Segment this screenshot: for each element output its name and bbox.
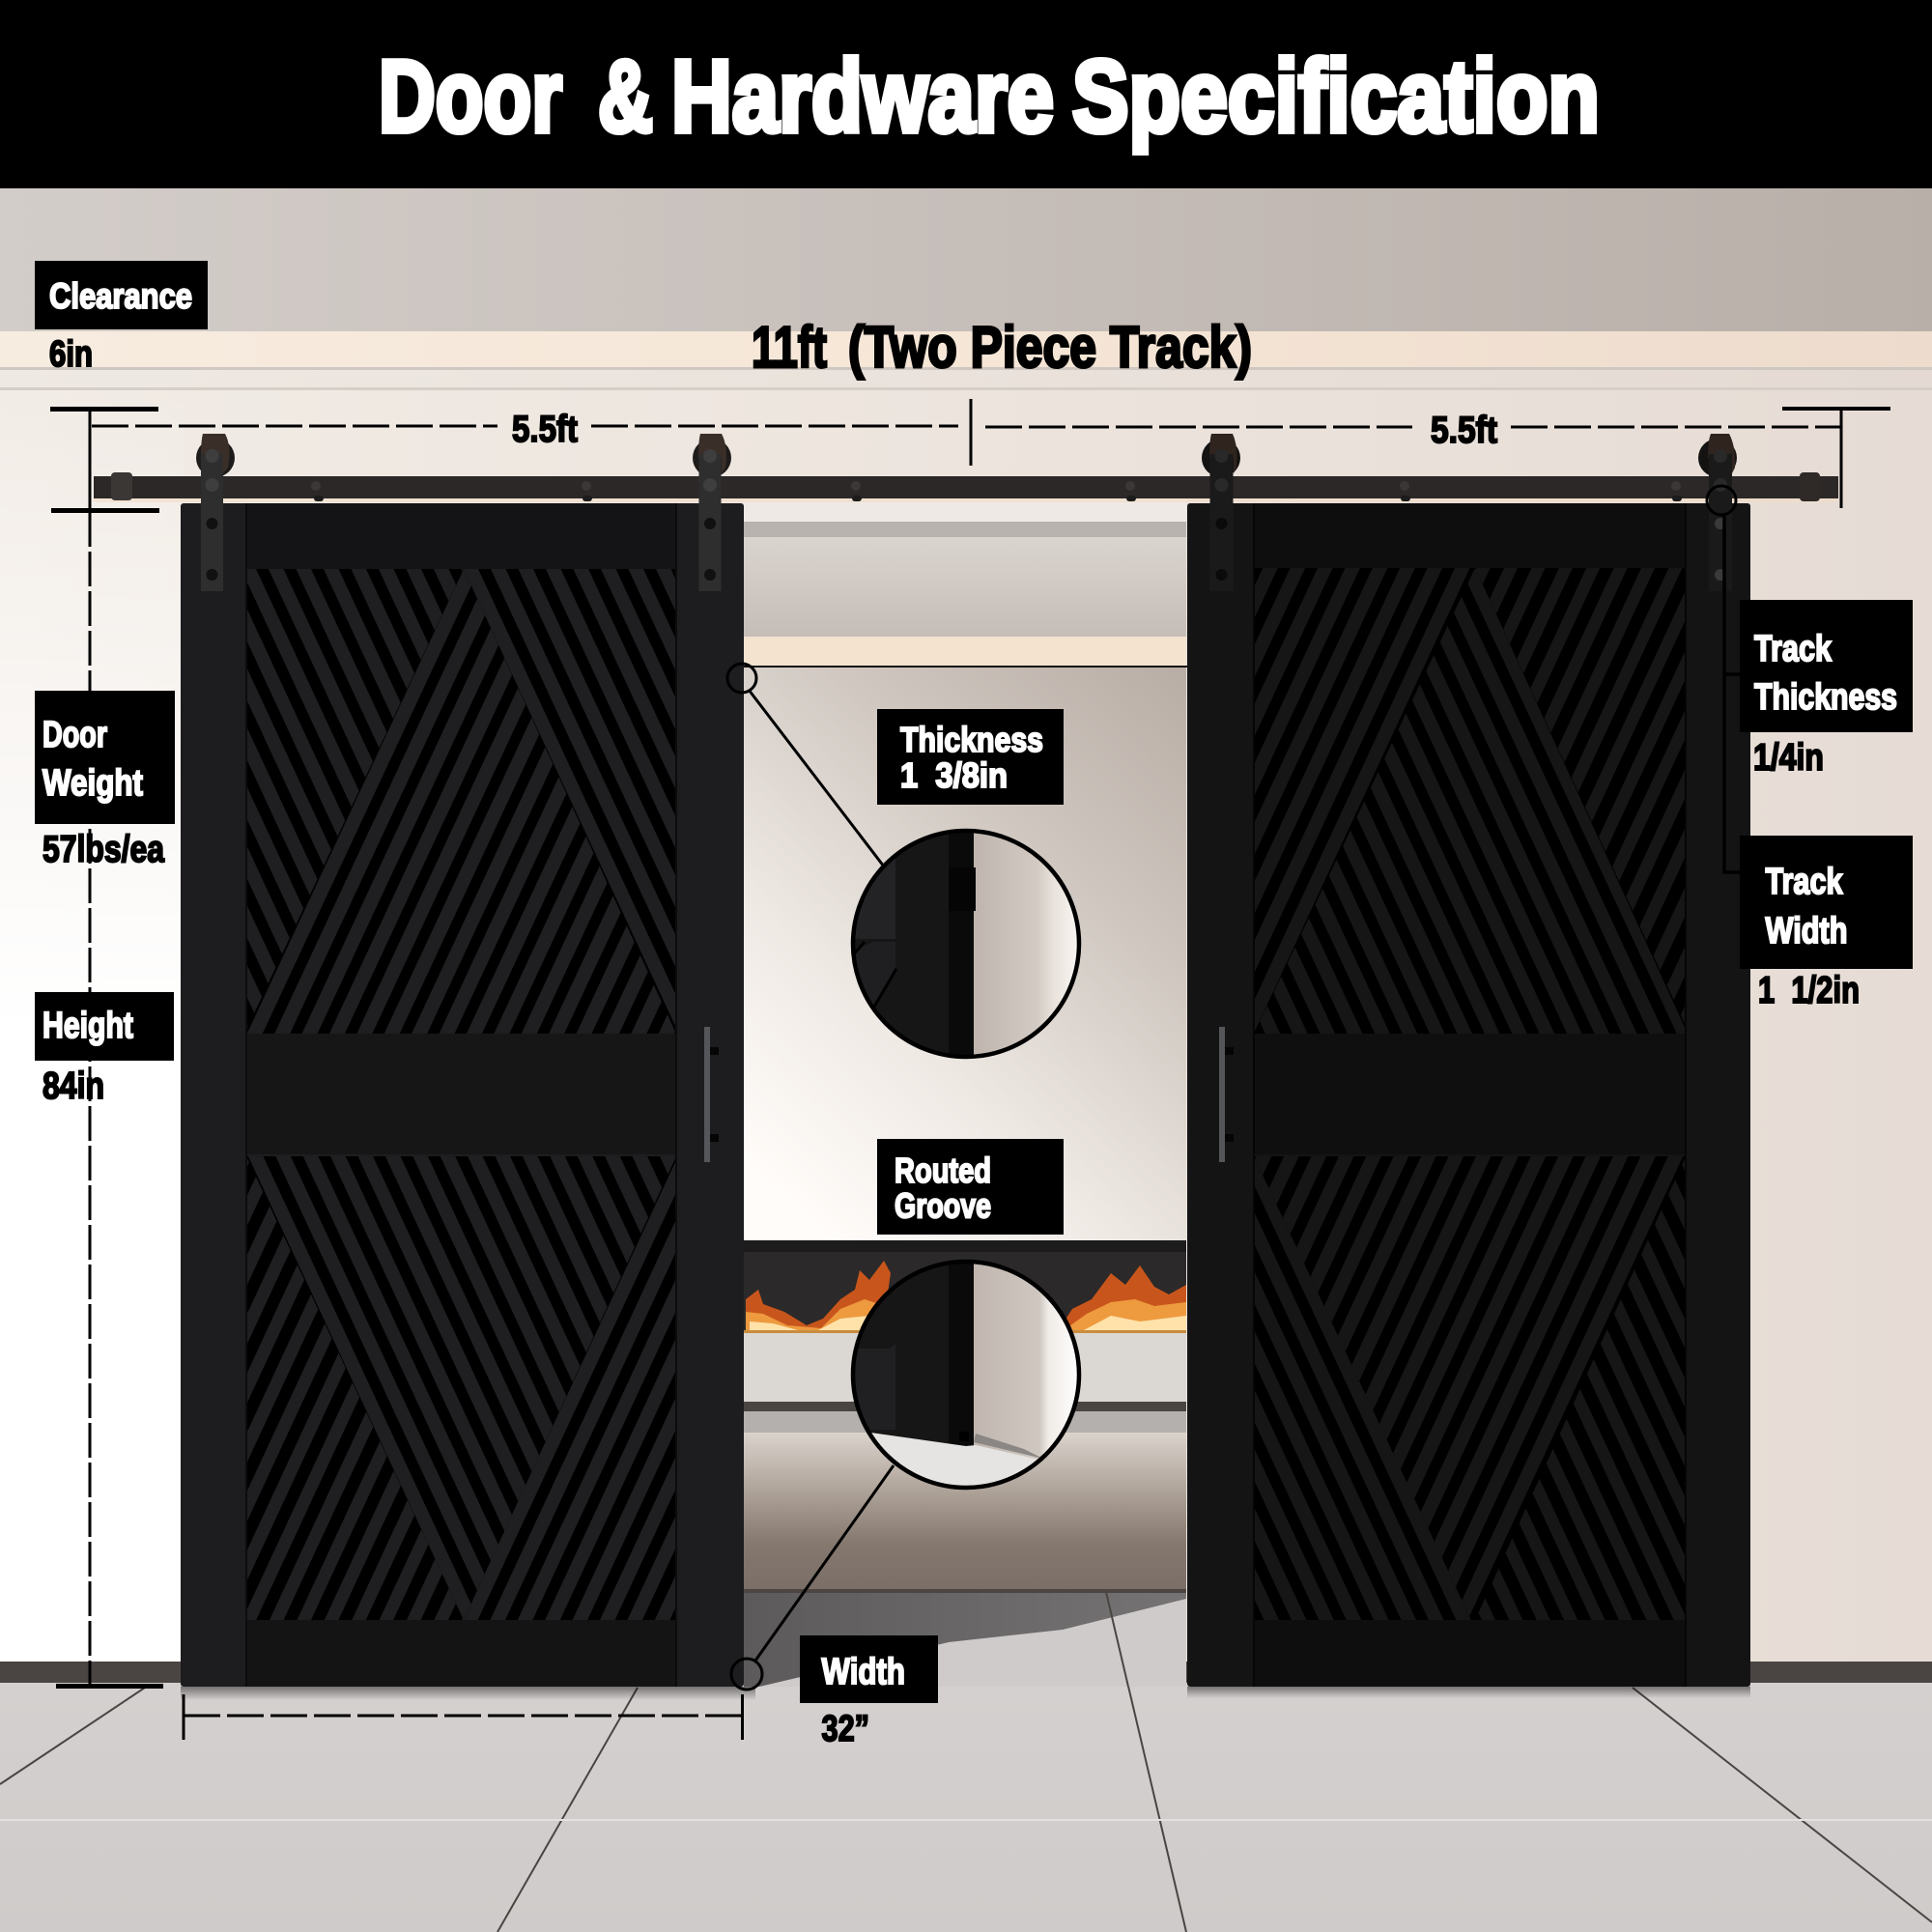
callout: width: 32” <box>821 1709 869 1749</box>
callout: width: Width <box>821 1652 905 1692</box>
panel: right door <box>1187 503 1750 1687</box>
floor <box>0 1683 1932 1932</box>
track bolts <box>311 481 1682 501</box>
callout: door weight <box>35 691 175 870</box>
mid rail <box>246 1034 676 1154</box>
callout: track thickness: 1/4in <box>1753 737 1824 779</box>
room cove light <box>744 637 1186 667</box>
leader: door width detail <box>731 1465 894 1690</box>
title: Door <box>379 40 562 154</box>
callout: track width: 1 1/2in <box>1758 970 1860 1011</box>
callout: door weight: Door <box>43 715 107 755</box>
carpet <box>744 1433 1186 1592</box>
title: & <box>598 40 653 154</box>
magnifier: routed groove <box>850 1256 1090 1497</box>
wall <box>0 390 1932 1662</box>
callout: clearance: 6in <box>49 334 93 375</box>
callout: height: 84in <box>43 1065 104 1107</box>
callout: height <box>35 992 174 1107</box>
callout: thickness: 1 3/8in <box>900 755 1008 795</box>
crown molding <box>0 367 1932 390</box>
hanger strap 1 <box>196 434 235 591</box>
title <box>379 40 1600 154</box>
magnifier: door thickness <box>850 826 1090 1067</box>
callout: door weight: 57lbs/ea <box>43 829 164 870</box>
callout: clearance: Clearance <box>49 276 192 316</box>
callout: routed groove: Routed <box>895 1151 991 1190</box>
heading: track length: 11ft <box>752 315 827 380</box>
ceiling <box>0 188 1932 331</box>
callout: track width: Width <box>1766 911 1847 952</box>
lower slat panel <box>247 1156 675 1620</box>
callout: width <box>800 1635 938 1749</box>
flames left <box>746 1261 894 1331</box>
hanger strap 2 <box>693 434 731 591</box>
callout: track width <box>1740 836 1913 1011</box>
callout: thickness <box>877 709 1064 805</box>
callout: clearance <box>35 261 208 375</box>
top rail <box>246 503 676 569</box>
top rail <box>1254 503 1686 568</box>
bottom rail <box>1254 1620 1686 1687</box>
mid rail <box>1254 1034 1686 1154</box>
lower slat panel <box>1255 1156 1685 1620</box>
label: left half track: 5.5ft <box>512 409 578 450</box>
callout: track thickness <box>1740 600 1913 779</box>
dimension: overall track width <box>50 399 1890 512</box>
panel: left door <box>181 503 744 1687</box>
upper slat panel <box>1255 568 1685 1034</box>
upper slat panel <box>247 569 675 1034</box>
handle <box>704 1027 719 1162</box>
barn door track <box>94 472 1838 502</box>
bottom rail <box>246 1620 676 1687</box>
room ceiling <box>744 537 1186 637</box>
handle <box>1219 1027 1234 1162</box>
callout: door weight: Weight <box>43 763 143 804</box>
header <box>744 498 1186 522</box>
dimension: door width <box>184 1694 742 1740</box>
leader: thickness detail <box>727 664 884 867</box>
hanger strap 4 <box>1698 434 1737 591</box>
title: Hardware <box>671 40 1054 154</box>
title bar <box>0 0 1932 188</box>
heading: track length <box>752 315 1252 380</box>
view through the opening <box>744 498 1187 1687</box>
callout: track width: Track <box>1766 862 1843 902</box>
hanger strap 3 <box>1202 434 1240 591</box>
callout: track thickness: Track <box>1754 629 1833 669</box>
flames right <box>1058 1265 1186 1331</box>
floor shadows under doors <box>181 1687 1750 1700</box>
callout: thickness: Thickness <box>900 720 1043 759</box>
room wall <box>744 667 1186 1240</box>
callout: track thickness: Thickness <box>1754 677 1897 718</box>
callout: height: Height <box>43 1006 133 1046</box>
leader: track callouts <box>1707 486 1740 872</box>
left wall glow <box>0 390 184 1662</box>
cove light <box>0 331 1932 367</box>
callout: routed groove: Groove <box>895 1186 991 1225</box>
track stops <box>111 472 132 500</box>
hearth <box>744 1333 1186 1402</box>
foreground floor <box>744 1593 1186 1687</box>
label: right half track: 5.5ft <box>1431 410 1497 451</box>
dimension: door height <box>56 512 163 1687</box>
fireplace <box>744 1240 1186 1333</box>
callout: routed groove <box>877 1139 1064 1235</box>
title: Specification <box>1072 40 1600 154</box>
baseboard <box>0 1662 1932 1684</box>
heading: track length: (Two Piece Track) <box>848 315 1252 380</box>
floor tile joints <box>0 1592 1932 1932</box>
